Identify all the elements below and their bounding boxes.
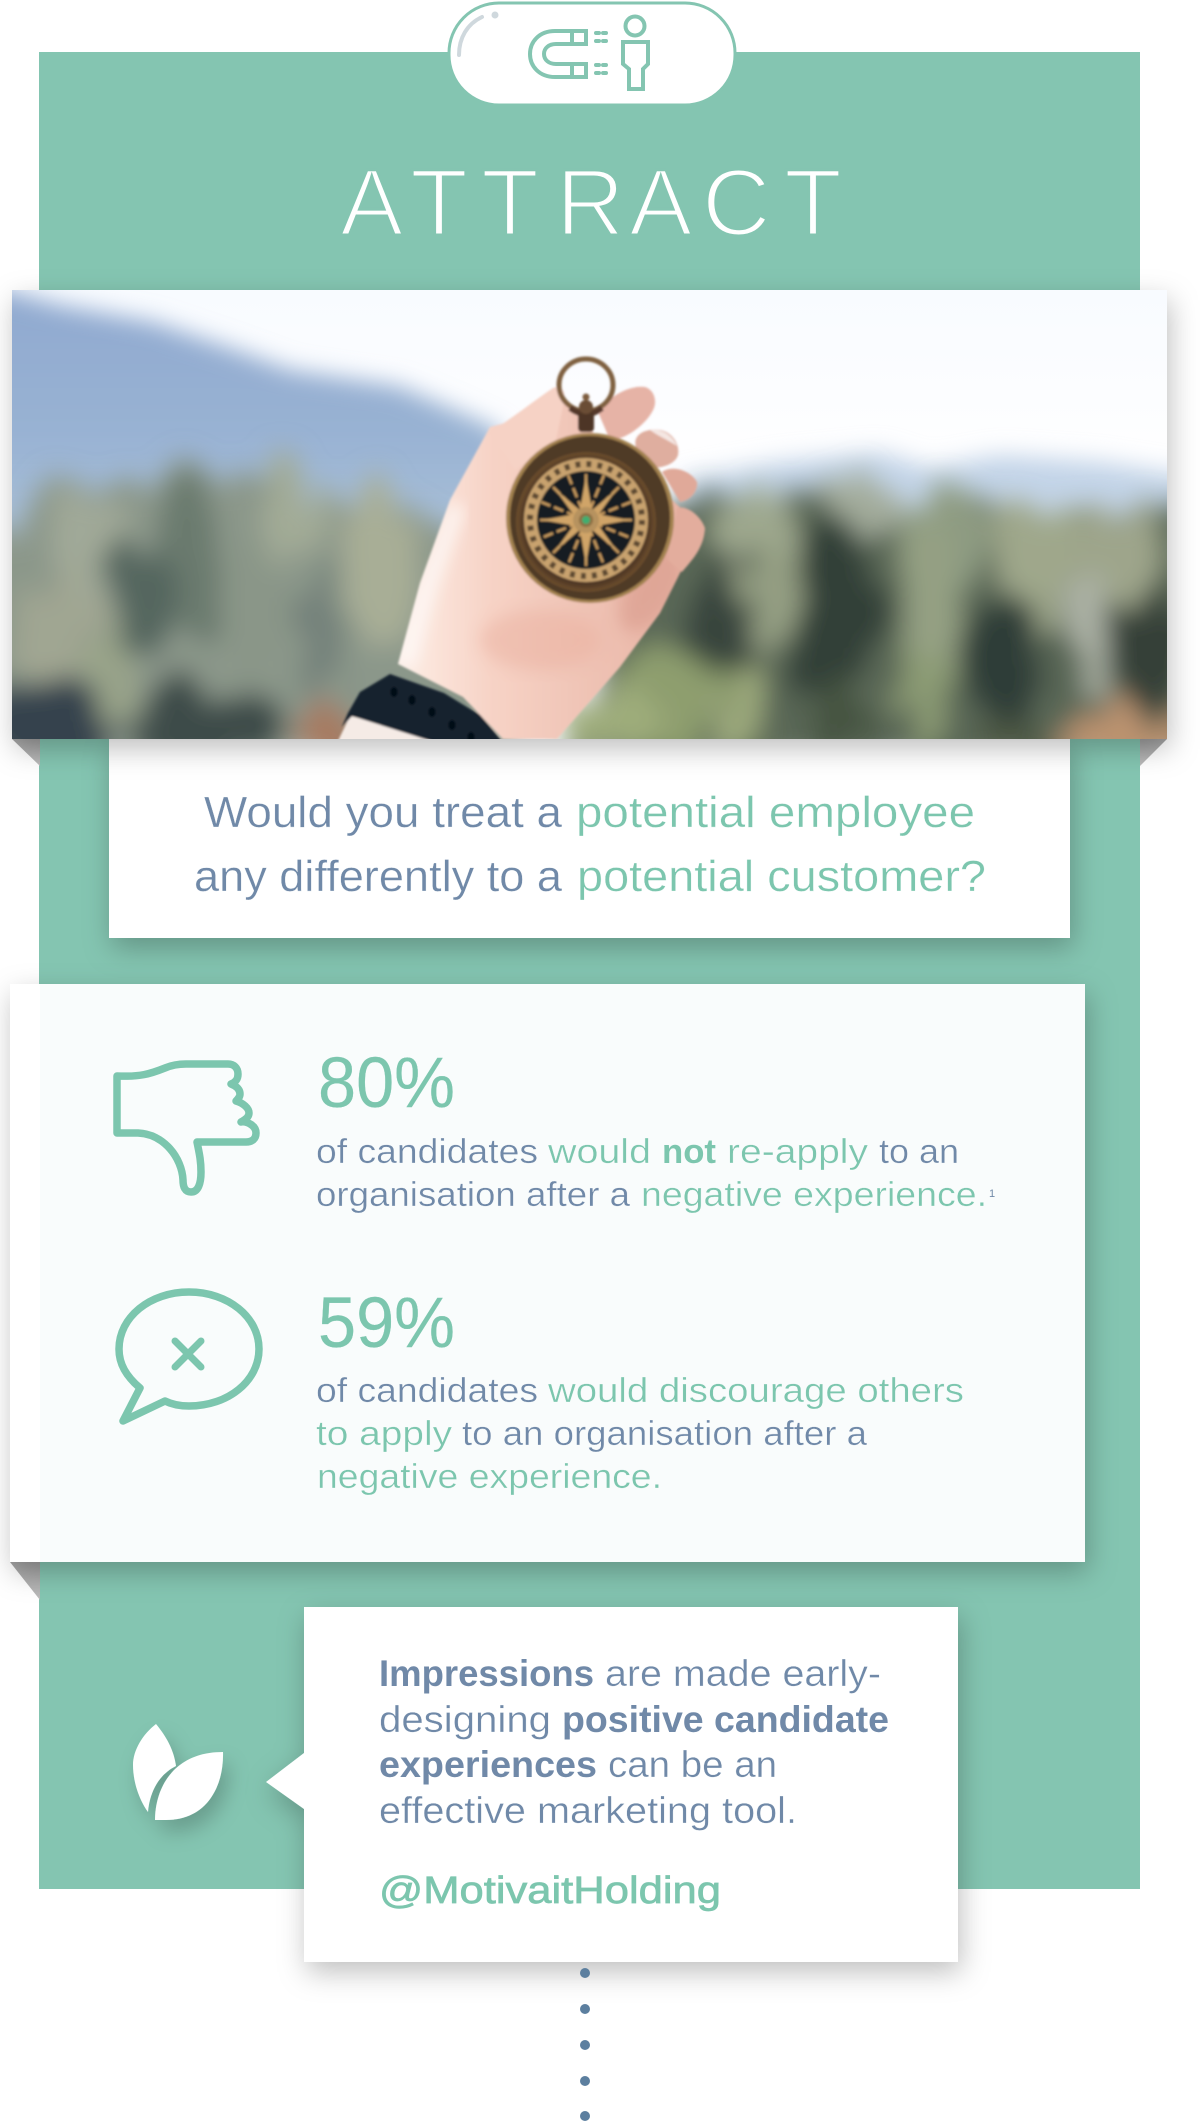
callout text: experiences <box>379 1744 597 1785</box>
stat text: 80%: 1 <box>989 1188 995 1200</box>
callout text: designing <box>379 1699 551 1740</box>
twitter handle: @MotivaitHolding <box>379 1870 721 1912</box>
question line 1: Would you treat a <box>204 788 563 837</box>
stat text: 59%: negative experience. <box>317 1458 662 1496</box>
hand <box>397 404 682 739</box>
stat text: 80%: re-apply <box>727 1133 868 1171</box>
callout <box>266 1607 958 1962</box>
photo: hand holding compass <box>0 280 1200 770</box>
fold: photo left <box>12 739 40 766</box>
callout text: Impressions <box>379 1653 594 1694</box>
stat text: 80%: of candidates <box>316 1133 538 1171</box>
fold: stats card left <box>10 1562 40 1600</box>
callout text: effective marketing tool. <box>379 1790 797 1831</box>
thumb <box>504 386 564 446</box>
stat text: 80%: organisation after a <box>316 1176 630 1214</box>
question line 1 <box>204 788 975 837</box>
stat text: 59%: would discourage others <box>547 1372 964 1410</box>
stat text: 80% <box>316 1133 995 1214</box>
panel: statistics <box>10 984 1085 1562</box>
stat: 59%: 59% <box>318 1284 455 1363</box>
stat text: 80%: negative experience. <box>641 1176 987 1214</box>
panel: attract background <box>39 52 1140 1889</box>
stat text: 59%: to an organisation after a <box>462 1415 867 1453</box>
stat text: 80%: to an <box>879 1133 959 1171</box>
compass <box>559 359 613 411</box>
stat text: 80%: not <box>662 1133 716 1171</box>
panel: question <box>109 739 1070 938</box>
fingers <box>598 387 655 440</box>
icon pill <box>449 3 735 105</box>
watch and wrist <box>336 359 705 745</box>
icon: speech bubble with cross <box>119 1292 259 1421</box>
stat text: 59% <box>316 1372 964 1496</box>
icon: leaves <box>133 1724 223 1820</box>
stat text: 59%: to apply <box>316 1415 452 1453</box>
dotted connector <box>580 1968 590 2121</box>
callout text: are made early- <box>605 1653 881 1694</box>
stat text: 80%: would <box>547 1133 651 1171</box>
question line 2: potential customer? <box>577 852 986 901</box>
title: ATTRACT <box>340 150 842 256</box>
fold: photo right <box>1140 739 1167 766</box>
stat text: 59%: of candidates <box>316 1372 538 1410</box>
callout text: positive candidate <box>562 1699 889 1740</box>
stat: 80%: 80% <box>318 1044 455 1123</box>
callout text <box>379 1653 889 1831</box>
icon: person <box>623 16 648 89</box>
question line 1: potential employee <box>576 788 975 837</box>
question line 2: any differently to a <box>194 852 563 901</box>
icon: thumbs down <box>117 1064 256 1192</box>
callout text: can be an <box>608 1744 777 1785</box>
question line 2 <box>194 852 986 901</box>
icon: magnet <box>530 31 606 77</box>
